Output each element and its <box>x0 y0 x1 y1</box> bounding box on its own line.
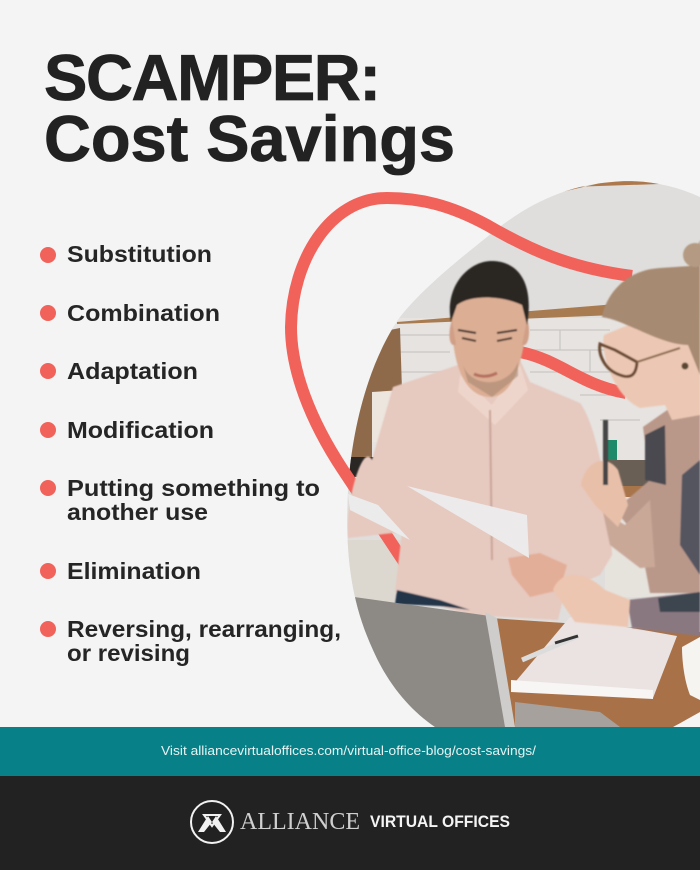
notebook <box>511 617 677 699</box>
title <box>44 41 455 175</box>
item: Adaptation: Adaptation <box>67 358 198 384</box>
woman <box>553 240 700 636</box>
title: SCAMPER: <box>44 41 381 114</box>
photo background: kitchen wall <box>347 181 700 632</box>
url banner <box>0 727 700 776</box>
item: Putting something to another use: Putting something to <box>67 475 320 501</box>
woman hands <box>581 461 628 527</box>
item: Substitution: Substitution <box>67 241 212 267</box>
man head <box>452 290 527 397</box>
table <box>490 618 700 727</box>
item: Combination: Combination <box>67 300 220 326</box>
logo text <box>240 809 510 835</box>
woman sleeve <box>603 500 655 568</box>
item: Putting something to another use: another use <box>67 499 208 525</box>
list <box>40 241 341 666</box>
man hand <box>508 553 567 597</box>
logo text: ALLIANCE <box>240 809 360 835</box>
man <box>347 261 612 620</box>
item: Reversing, rearranging, or revising <box>40 616 341 666</box>
item: Reversing, rearranging, or revising: or revising <box>67 640 190 666</box>
photo: people and desk <box>340 240 700 735</box>
item: Modification: Modification <box>67 417 214 443</box>
title: Cost Savings <box>44 102 455 175</box>
item: Reversing, rearranging, or revising: Reversing, rearranging, <box>67 616 341 642</box>
laptop <box>340 595 620 727</box>
ribbon: main loop <box>291 198 632 568</box>
item: Putting something to another use <box>40 475 320 525</box>
ribbon: behind man <box>520 352 626 393</box>
woman face <box>603 320 700 420</box>
footer <box>0 776 700 870</box>
ribbon bottom <box>678 720 684 724</box>
logo text: VIRTUAL OFFICES <box>370 812 510 831</box>
logo icon <box>191 801 233 843</box>
woman shirt body <box>615 405 700 593</box>
cup <box>682 637 700 700</box>
url banner: Visit alliancevirtualoffices.com/virtual-office-blog/cost-savings/ <box>161 743 536 758</box>
item: Elimination: Elimination <box>67 558 201 584</box>
papers <box>348 486 529 558</box>
